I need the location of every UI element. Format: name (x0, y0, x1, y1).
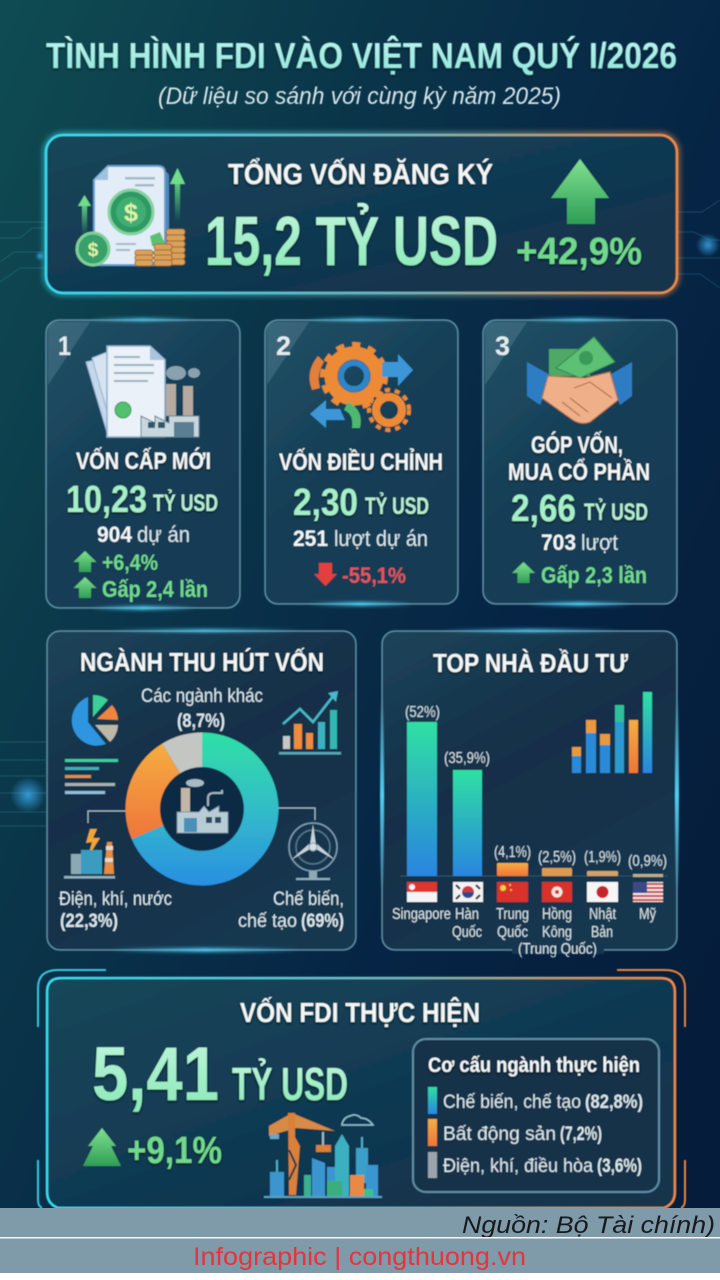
icon: pie chart with legend (65, 695, 118, 794)
value: implemented FDI (92, 1032, 348, 1117)
value: new capital: TỶ USD (153, 488, 218, 517)
value: capital contribution (511, 488, 648, 530)
number 2: 2 (276, 331, 291, 361)
label: other sectors: (8,7%) (177, 711, 225, 732)
value: new capital (66, 479, 218, 521)
number 1: 1 (58, 331, 71, 361)
legend: electricity gas air conditioning (428, 1152, 642, 1178)
country labels: Nhật (589, 906, 616, 923)
label: manufacturing (238, 889, 344, 932)
country labels: Hồng (542, 906, 572, 923)
deals: capital contribution: 703 (541, 530, 576, 555)
value: implemented FDI: 5,41 (92, 1032, 219, 1117)
growth: new capital multiple: Gấp 2,4 lần (102, 576, 208, 602)
bar chart: investors: (2,5%) (538, 849, 576, 866)
growth: total registered capital: +42,9% (516, 231, 642, 273)
value: total registered capital: 15,2 TỶ USD (205, 202, 498, 280)
country labels: Hàn (455, 906, 479, 923)
bar chart: investors: (35,9%) (444, 750, 490, 767)
panel: total registered capital (46, 135, 677, 293)
projects: adjusted capital: 251 (293, 526, 328, 551)
heading: total registered capital: TỔNG VỐN ĐĂNG KÝ (228, 157, 493, 191)
flag: South Korea (453, 882, 483, 902)
label: manufacturing: chế tạo (238, 911, 297, 932)
legend: real estate: Bất động sản (443, 1124, 556, 1145)
heading: implemented FDI: VỐN FDI THỰC HIỆN (240, 996, 480, 1028)
decorative circuit lines (0, 200, 720, 826)
icon: handshake with money (527, 337, 632, 423)
label: electricity gas water: Điện, khí, nước (59, 889, 172, 910)
icon: document with coins: $ (88, 240, 99, 261)
bar chart: investors: (1,9%) (584, 849, 621, 866)
value: adjusted capital: 2,30 (293, 482, 358, 524)
deals: capital contribution: lượt (581, 530, 618, 555)
deals: capital contribution (541, 530, 618, 555)
bar chart: investors: (4,1%) (494, 844, 531, 861)
legend: manufacturing: (82,8%) (585, 1092, 643, 1113)
panel: card 2 adjusted capital (265, 318, 458, 606)
icon: documents and factory (86, 346, 200, 437)
value: adjusted capital (293, 482, 429, 524)
legend: electricity gas air conditioning: Điện, khí, điều hòa (443, 1156, 593, 1177)
value: adjusted capital: TỶ USD (365, 491, 429, 520)
panel: implemented FDI (38, 970, 685, 1208)
heading: top investors: TOP NHÀ ĐẦU TƯ (433, 648, 628, 678)
legend: real estate (428, 1119, 602, 1146)
value: implemented FDI: TỶ USD (232, 1058, 348, 1110)
value: new capital: 10,23 (66, 479, 147, 521)
projects: new capital: 904 (97, 522, 133, 547)
flag: China (497, 882, 528, 902)
country labels: Singapore (392, 906, 451, 923)
panel: top investors (380, 629, 679, 958)
label: electricity gas water: (22,3%) (60, 911, 118, 932)
bar chart: investors (400, 704, 668, 877)
country labels: Trung (496, 906, 529, 923)
source text: Nguồn: Bộ Tài chính) (462, 1212, 715, 1239)
credit text: Infographic | congthuong.vn (193, 1243, 526, 1271)
decline: adjusted capital (314, 563, 406, 588)
value: capital contribution: 2,66 (511, 488, 576, 530)
flag: USA (633, 882, 663, 902)
projects: new capital (97, 522, 190, 547)
projects: adjusted capital: lượt dự án (334, 526, 428, 551)
icon: factory in donut (177, 779, 228, 833)
footer: source band (0, 1208, 720, 1239)
country labels: Quốc (497, 924, 528, 941)
heading: sectors: NGÀNH THU HÚT VỐN (80, 647, 324, 677)
value: capital contribution: TỶ USD (584, 497, 648, 526)
heading: capital contribution: GÓP VỐN, (531, 431, 623, 459)
bar chart: investors: (0,9%) (628, 853, 667, 870)
country labels: Kông (542, 924, 572, 941)
mini bar chart icon (572, 692, 652, 773)
footer: credit band (0, 1237, 720, 1280)
growth: capital contribution: Gấp 2,3 lần (541, 562, 647, 588)
heading: adjusted capital: VỐN ĐIỀU CHỈNH (279, 447, 443, 476)
growth: implemented FDI (83, 1128, 222, 1172)
label: other sectors (141, 686, 263, 732)
country labels (392, 906, 656, 958)
flag: Japan (587, 882, 618, 902)
growth: new capital percent: +6,4% (102, 550, 158, 575)
legend: manufacturing: Chế biến, chế tạo (443, 1092, 581, 1113)
label: manufacturing: Chế biến, (273, 889, 344, 910)
icon: energy plant (64, 829, 115, 878)
icon: gears and arrows (310, 345, 413, 430)
growth: new capital percent (74, 550, 158, 575)
legend: manufacturing (428, 1087, 643, 1114)
panel: implemented sector structure (413, 1039, 659, 1192)
decline: adjusted capital: -55,1% (342, 563, 406, 588)
icon: turbine (289, 823, 337, 880)
projects: new capital: dự án (137, 522, 190, 547)
panel: sectors attracting capital (47, 629, 356, 952)
heading: capital contribution: MUA CỔ PHẦN (508, 458, 650, 486)
donut chart (126, 732, 279, 886)
heading: new capital: VỐN CẤP MỚI (76, 447, 211, 475)
label: other sectors: Các ngành khác (141, 686, 263, 707)
country labels: Mỹ (639, 906, 656, 923)
country labels: Quốc (452, 924, 482, 941)
label: electricity gas water (59, 889, 172, 932)
bar chart: investors: (52%) (405, 704, 440, 721)
growth: implemented FDI: +9,1% (127, 1130, 222, 1172)
country labels: (Trung Quốc) (518, 941, 597, 958)
subtitle: (Dữ liệu so sánh với cùng kỳ năm 2025) (158, 83, 561, 110)
country labels: Bản (591, 924, 613, 941)
label: manufacturing: (69%) (301, 911, 344, 932)
flag: Hong Kong (542, 882, 572, 902)
legend: real estate: (7,2%) (560, 1124, 602, 1145)
heading: capital contribution (508, 431, 650, 486)
projects: adjusted capital (293, 526, 428, 551)
flag: Singapore (407, 882, 437, 902)
panel: card 3 capital contribution (483, 318, 677, 606)
icon: large up arrow (551, 159, 609, 224)
icon: crane and city (264, 1113, 382, 1198)
growth: capital contribution (512, 562, 647, 588)
icon: rising bar chart (279, 691, 341, 754)
number 3: 3 (495, 331, 510, 361)
icon: document with coins (77, 166, 185, 266)
heading: sector structure: Cơ cấu ngành thực hiện (428, 1054, 640, 1077)
panel: card 1 new capital (46, 318, 240, 610)
legend: electricity gas air conditioning: (3,6%) (597, 1156, 642, 1177)
connector lines (88, 808, 315, 823)
icon: document with coins: $ (124, 199, 138, 227)
